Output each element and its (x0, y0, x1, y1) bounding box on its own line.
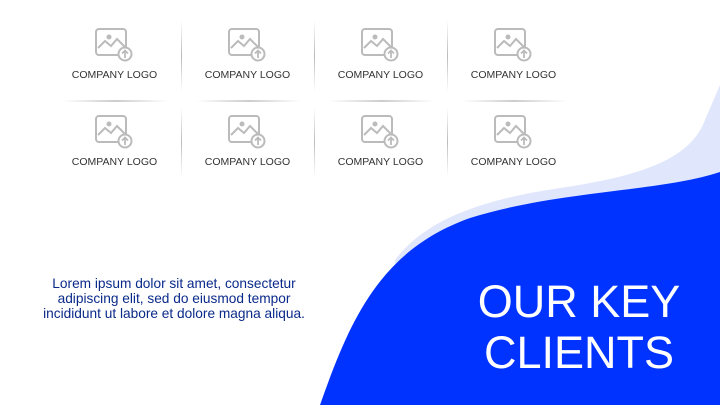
logo 7 (338, 115, 423, 168)
logo 6: COMPANY LOGO (205, 156, 290, 168)
body text: Lorem ipsum dolor sit amet, consectetur (52, 276, 296, 291)
logo 5 (72, 115, 157, 168)
logo 2: COMPANY LOGO (205, 69, 290, 81)
logo 2 (205, 28, 290, 81)
body text: adipiscing elit, sed do eiusmod tempor (58, 291, 290, 306)
body text (43, 276, 305, 321)
logo 3 (338, 28, 423, 81)
logo 4: COMPANY LOGO (471, 69, 556, 81)
logo 7: COMPANY LOGO (338, 156, 423, 168)
logo 8 (471, 115, 556, 168)
logo 1 (72, 28, 157, 81)
body text: incididunt ut labore et dolore magna aliqua. (43, 306, 305, 321)
logo 6 (205, 115, 290, 168)
logo 8: COMPANY LOGO (471, 156, 556, 168)
blue wave (320, 172, 720, 405)
title (478, 276, 680, 378)
logo 3: COMPANY LOGO (338, 69, 423, 81)
logo 4 (471, 28, 556, 81)
logo grid (72, 24, 558, 172)
logo 5: COMPANY LOGO (72, 156, 157, 168)
title: CLIENTS (484, 327, 674, 378)
logo 1: COMPANY LOGO (72, 69, 157, 81)
title: OUR KEY (478, 276, 680, 327)
light wave (395, 85, 720, 405)
